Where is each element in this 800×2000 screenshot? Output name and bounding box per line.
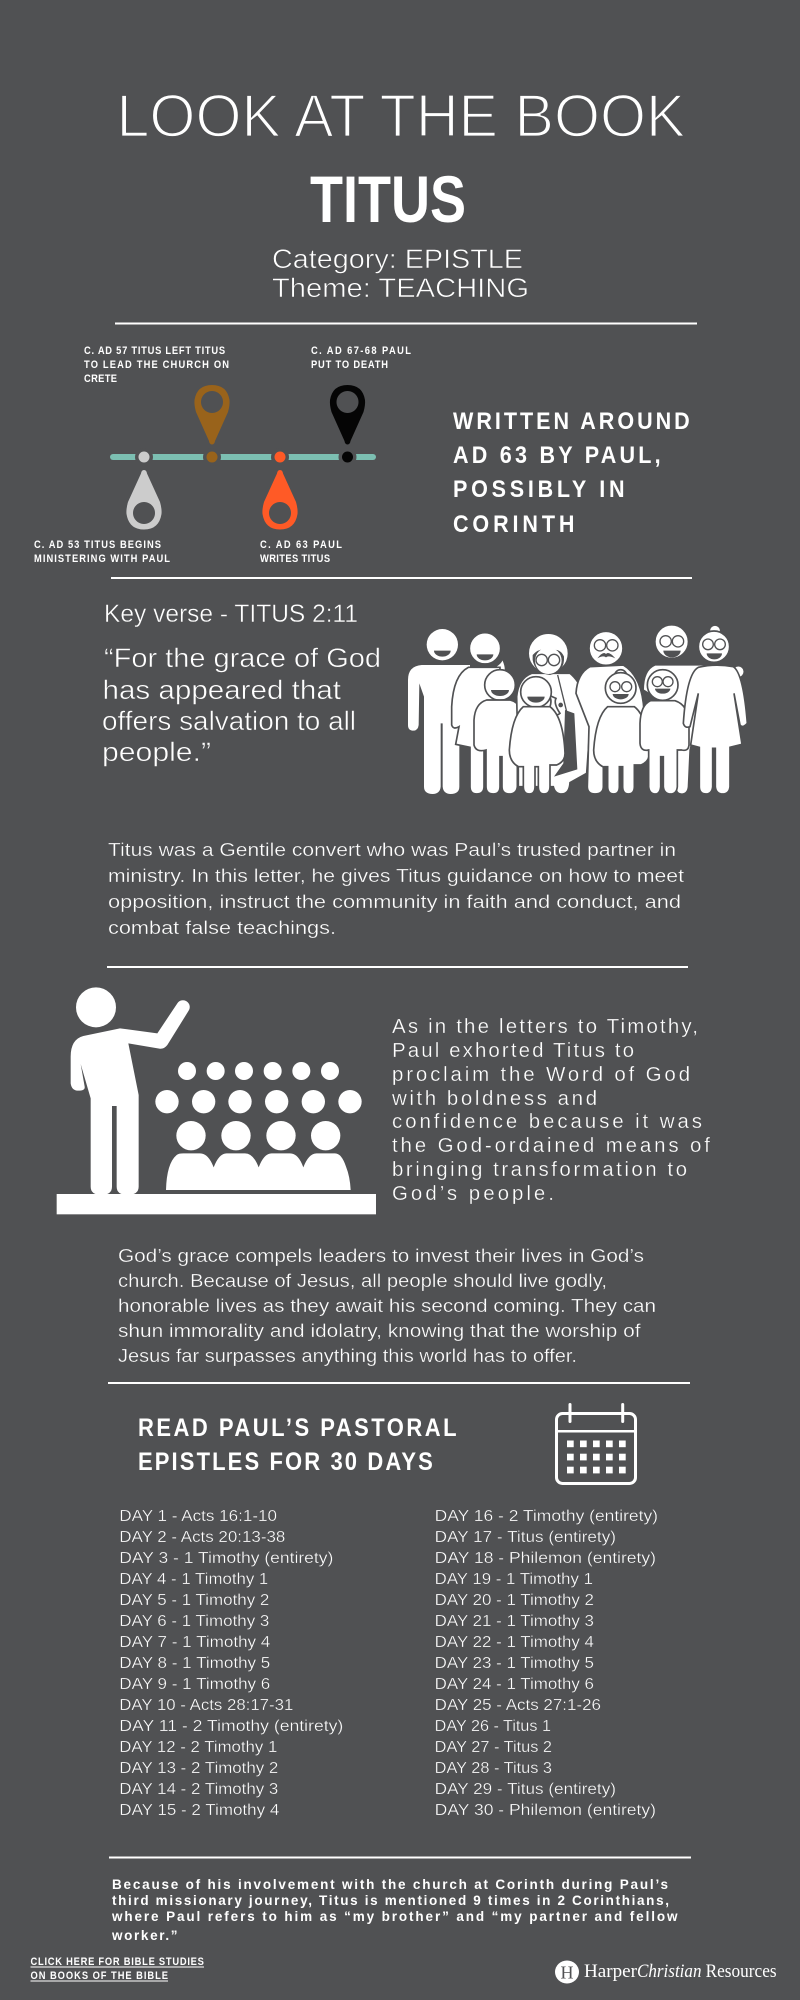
list: days 1 to 15: DAY 4 - 1 Timothy 1: [119, 1571, 268, 1588]
icon: calendar: [556, 1403, 636, 1484]
stage: [57, 1194, 376, 1214]
timeline label: AD 53: [34, 539, 170, 565]
text block: about Titus: [108, 839, 684, 938]
list: days 1 to 15: DAY 3 - 1 Timothy (entirety): [119, 1550, 333, 1567]
list: days 16 to 30: DAY 30 - Philemon (entirety): [435, 1802, 656, 1819]
person: child right: [640, 670, 689, 794]
timeline label: AD 63: [260, 539, 342, 565]
text block: grace: church. Because of Jesus, all people should live godly,: [118, 1270, 607, 1291]
pin: brown: [194, 385, 230, 444]
text block: about Titus: ministry. In this letter, he gives Titus guidance on how to meet: [108, 865, 684, 886]
text block: verse quote: [102, 643, 381, 767]
link: bible studies: ON BOOKS OF THE BIBLE: [30, 1970, 168, 1982]
timeline label: AD 67-68: C. AD 67-68 PAUL: [311, 345, 411, 357]
list: days 1 to 15: DAY 12 - 2 Timothy 1: [119, 1739, 277, 1756]
list: days 16 to 30: DAY 20 - 1 Timothy 2: [435, 1592, 594, 1609]
person: woman left: [452, 633, 506, 794]
text block: grace: honorable lives as they await his second coming. They can: [118, 1295, 656, 1316]
list: days 1 to 15: DAY 2 - Acts 20:13-38: [119, 1529, 285, 1546]
list: days 1 to 15: DAY 13 - 2 Timothy 2: [119, 1760, 278, 1777]
list: days 16 to 30: DAY 29 - Titus (entirety): [435, 1781, 616, 1798]
theme label: Theme: TEACHING: [272, 273, 529, 303]
timeline bar: [110, 454, 376, 460]
list: days 16 to 30: DAY 27 - Titus 2: [435, 1739, 552, 1756]
icon: group of people: [408, 625, 747, 794]
list: days 1 to 15: DAY 11 - 2 Timothy (entirety): [119, 1718, 343, 1735]
list: days 16 to 30: DAY 22 - 1 Timothy 4: [435, 1634, 594, 1651]
logo wordmark: [584, 1961, 777, 1982]
text block: exhortation: the God-ordained means of: [392, 1134, 710, 1157]
logo mark: H: [560, 1962, 574, 1982]
text block: exhortation: proclaim the Word of God: [392, 1063, 690, 1086]
text block: exhortation: confidence because it was: [392, 1110, 702, 1133]
person: woman right: [683, 625, 747, 794]
text block: about Titus: Titus was a Gentile convert who was Paul’s trusted partner in: [108, 839, 676, 860]
pin: orange: [262, 470, 298, 530]
text block: exhortation: [391, 1015, 710, 1205]
text block: verse quote: offers salvation to all: [102, 706, 356, 736]
timeline label: AD 63: WRITES TITUS: [260, 553, 330, 565]
text block: written around: CORINTH: [453, 510, 574, 537]
text block: about Titus: opposition, instruct the community in faith and conduct, and: [108, 891, 681, 912]
list: days 1 to 15: DAY 10 - Acts 28:17-31: [119, 1697, 293, 1714]
list: days 16 to 30: DAY 25 - Acts 27:1-26: [435, 1697, 601, 1714]
list: days 1 to 15: DAY 15 - 2 Timothy 4: [119, 1802, 280, 1819]
text block: written around: AD 63 BY PAUL,: [453, 441, 661, 468]
logo wordmark: Harper: [584, 1961, 638, 1982]
list: days 16 to 30: DAY 23 - 1 Timothy 5: [435, 1655, 594, 1672]
text block: closing fact: third missionary journey, Titus is mentioned 9 times in 2 Corinthians,: [112, 1893, 669, 1908]
text block: written around: POSSIBLY IN: [453, 475, 625, 502]
list: days 16 to 30: DAY 19 - 1 Timothy 1: [435, 1571, 593, 1588]
text block: closing fact: [111, 1877, 678, 1943]
text block: written around: [453, 407, 690, 537]
timeline label: AD 57: CRETE: [84, 373, 117, 385]
logo wordmark: Christian: [637, 1961, 702, 1982]
list: days 1 to 15: DAY 5 - 1 Timothy 2: [119, 1592, 269, 1609]
list: days 1 to 15: DAY 1 - Acts 16:1-10: [119, 1508, 277, 1525]
pin: grey: [126, 470, 162, 530]
person: man far left: [408, 629, 470, 794]
text block: exhortation: bringing transformation to: [392, 1158, 687, 1181]
text block: exhortation: As in the letters to Timothy,: [392, 1015, 698, 1038]
link: bible studies: CLICK HERE FOR BIBLE STUDIES: [30, 1956, 204, 1968]
text block: exhortation: Paul exhorted Titus to: [392, 1039, 634, 1062]
heading: key verse: Key verse - TITUS 2:11: [104, 600, 358, 628]
list: days 16 to 30: DAY 28 - Titus 3: [435, 1760, 552, 1777]
text block: verse quote: people.”: [102, 737, 211, 767]
text block: closing fact: worker.”: [111, 1928, 178, 1943]
audience: [155, 1062, 362, 1190]
panel: timeline: [34, 345, 411, 565]
list: days 1 to 15: DAY 14 - 2 Timothy 3: [119, 1781, 278, 1798]
list: days 1 to 15: DAY 8 - 1 Timothy 5: [119, 1655, 270, 1672]
person: grandma in coat: [517, 633, 590, 794]
text block: grace: shun immorality and idolatry, knowing that the worship of: [118, 1320, 641, 1341]
timeline label: AD 57: C. AD 57 TITUS LEFT TITUS: [84, 345, 225, 357]
timeline label: AD 53: C. AD 53 TITUS BEGINS: [34, 539, 161, 551]
title: look at the book: LOOK AT THE BOOK: [116, 82, 686, 150]
text block: closing fact: Because of his involvement with the church at Corinth during Paul’s: [112, 1877, 668, 1892]
text block: exhortation: God’s people.: [392, 1182, 554, 1205]
timeline label: AD 57: TO LEAD THE CHURCH ON: [84, 359, 229, 371]
list: days 16 to 30: DAY 24 - 1 Timothy 6: [435, 1676, 594, 1693]
logo mark: [555, 1960, 579, 1984]
category label: Category: EPISTLE: [272, 244, 523, 274]
person: girl centre: [509, 677, 565, 794]
list: days 1 to 15: DAY 7 - 1 Timothy 4: [119, 1634, 271, 1651]
person: man with moustache: [576, 632, 647, 794]
person: man right: [643, 625, 710, 794]
timeline label: AD 67-68: PUT TO DEATH: [311, 359, 388, 371]
person: girl with bun: [594, 670, 649, 794]
heading: reading plan: [138, 1414, 457, 1475]
list: days 1 to 15: DAY 6 - 1 Timothy 3: [119, 1613, 269, 1630]
logo wordmark: Resources: [706, 1961, 777, 1982]
text block: written around: WRITTEN AROUND: [453, 407, 690, 434]
timeline label: AD 57: [84, 345, 229, 385]
list: days 16 to 30: DAY 21 - 1 Timothy 3: [435, 1613, 594, 1630]
text block: about Titus: combat false teachings.: [108, 917, 336, 938]
list: days 1 to 15: [119, 1508, 343, 1819]
text block: verse quote: has appeared that: [102, 675, 342, 705]
text block: verse quote: “For the grace of God: [104, 643, 381, 673]
timeline dots: [135, 448, 356, 466]
timeline label: AD 63: C. AD 63 PAUL: [260, 539, 342, 551]
text block: grace: Jesus far surpasses anything this world has to offer.: [118, 1345, 577, 1366]
logo: HarperChristian Resources: [555, 1960, 777, 1984]
list: days 16 to 30: DAY 16 - 2 Timothy (entirety): [435, 1508, 658, 1525]
header: title block: [116, 82, 686, 303]
teacher figure: [71, 987, 190, 1195]
pin: black: [330, 385, 365, 444]
list: days 16 to 30: [435, 1508, 658, 1819]
heading: reading plan: EPISTLES FOR 30 DAYS: [138, 1448, 433, 1475]
timeline label: AD 53: MINISTERING WITH PAUL: [34, 553, 170, 565]
link: bible studies: [30, 1956, 204, 1982]
person: child left: [474, 670, 523, 794]
heading: reading plan: READ PAUL’S PASTORAL: [138, 1414, 457, 1441]
list: days 1 to 15: DAY 9 - 1 Timothy 6: [119, 1676, 270, 1693]
text block: closing fact: where Paul refers to him as “my brother” and “my partner and fellow: [111, 1909, 678, 1924]
list: days 16 to 30: DAY 26 - Titus 1: [435, 1718, 551, 1735]
text block: grace: [118, 1245, 656, 1366]
text block: grace: God’s grace compels leaders to invest their lives in God’s: [118, 1245, 644, 1266]
heading: book name: TITUS: [310, 162, 466, 236]
icon: teacher and audience: [57, 987, 376, 1214]
list: days 16 to 30: DAY 17 - Titus (entirety): [435, 1529, 616, 1546]
text block: exhortation: with boldness and: [391, 1087, 597, 1110]
timeline label: AD 67-68: [311, 345, 411, 371]
list: days 16 to 30: DAY 18 - Philemon (entirety): [435, 1550, 656, 1567]
